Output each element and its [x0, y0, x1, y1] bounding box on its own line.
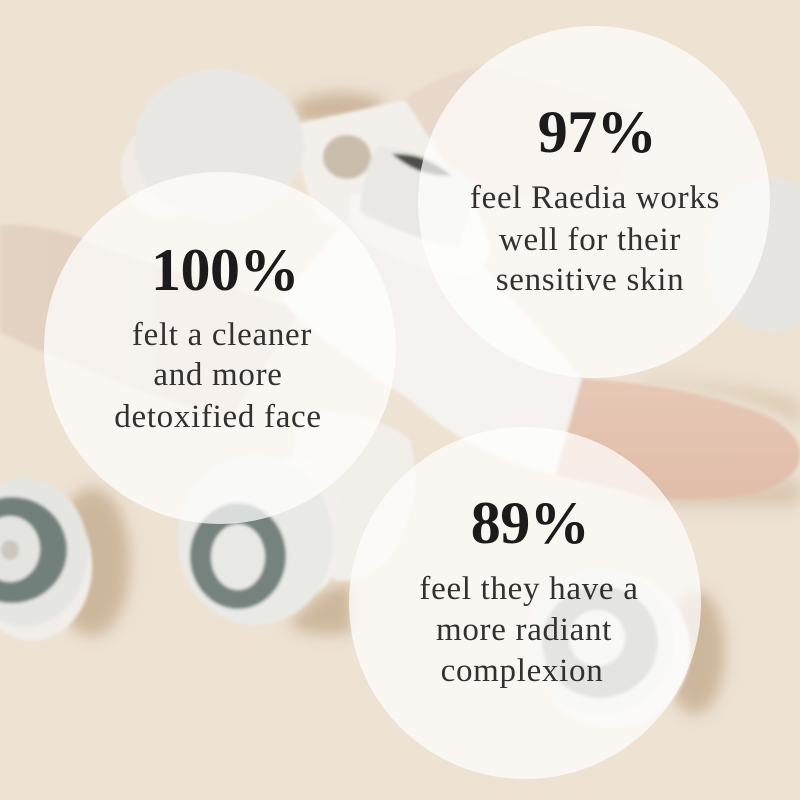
caption 97%: well for their	[499, 222, 681, 258]
caption 100%: detoxified face	[114, 399, 322, 435]
caption 97%: sensitive skin	[496, 262, 684, 298]
caption 89%: complexion	[441, 653, 603, 689]
caption 100%: felt a cleaner	[132, 317, 312, 353]
stat number 97%: 97%	[538, 99, 656, 165]
beige handle top	[395, 65, 640, 200]
caption 89%: feel they have a	[419, 571, 639, 607]
caption 89%: more radiant	[436, 612, 612, 648]
circle: 89% stat	[349, 427, 701, 779]
stat number 100%: 100%	[151, 237, 299, 303]
center gray ring brush	[177, 455, 345, 625]
white top-left brush head	[121, 122, 209, 218]
beige handle left	[0, 225, 300, 420]
device button window	[323, 135, 371, 179]
caption 97%: feel Raedia works	[470, 180, 720, 216]
white device lower body	[290, 410, 415, 581]
white device top	[296, 100, 470, 230]
circle: 100% stat	[44, 172, 396, 524]
small central brush head	[349, 146, 490, 278]
white right brush head	[706, 178, 800, 332]
bottom right white brush	[526, 570, 690, 728]
caption 100%: and more	[153, 357, 283, 393]
shadows	[54, 93, 800, 714]
left gray ring brush	[0, 478, 92, 641]
circle: 97% stat	[418, 26, 770, 378]
stat number 89%: 89%	[471, 490, 589, 556]
white device main body	[280, 215, 582, 475]
pink handle right	[552, 378, 800, 499]
